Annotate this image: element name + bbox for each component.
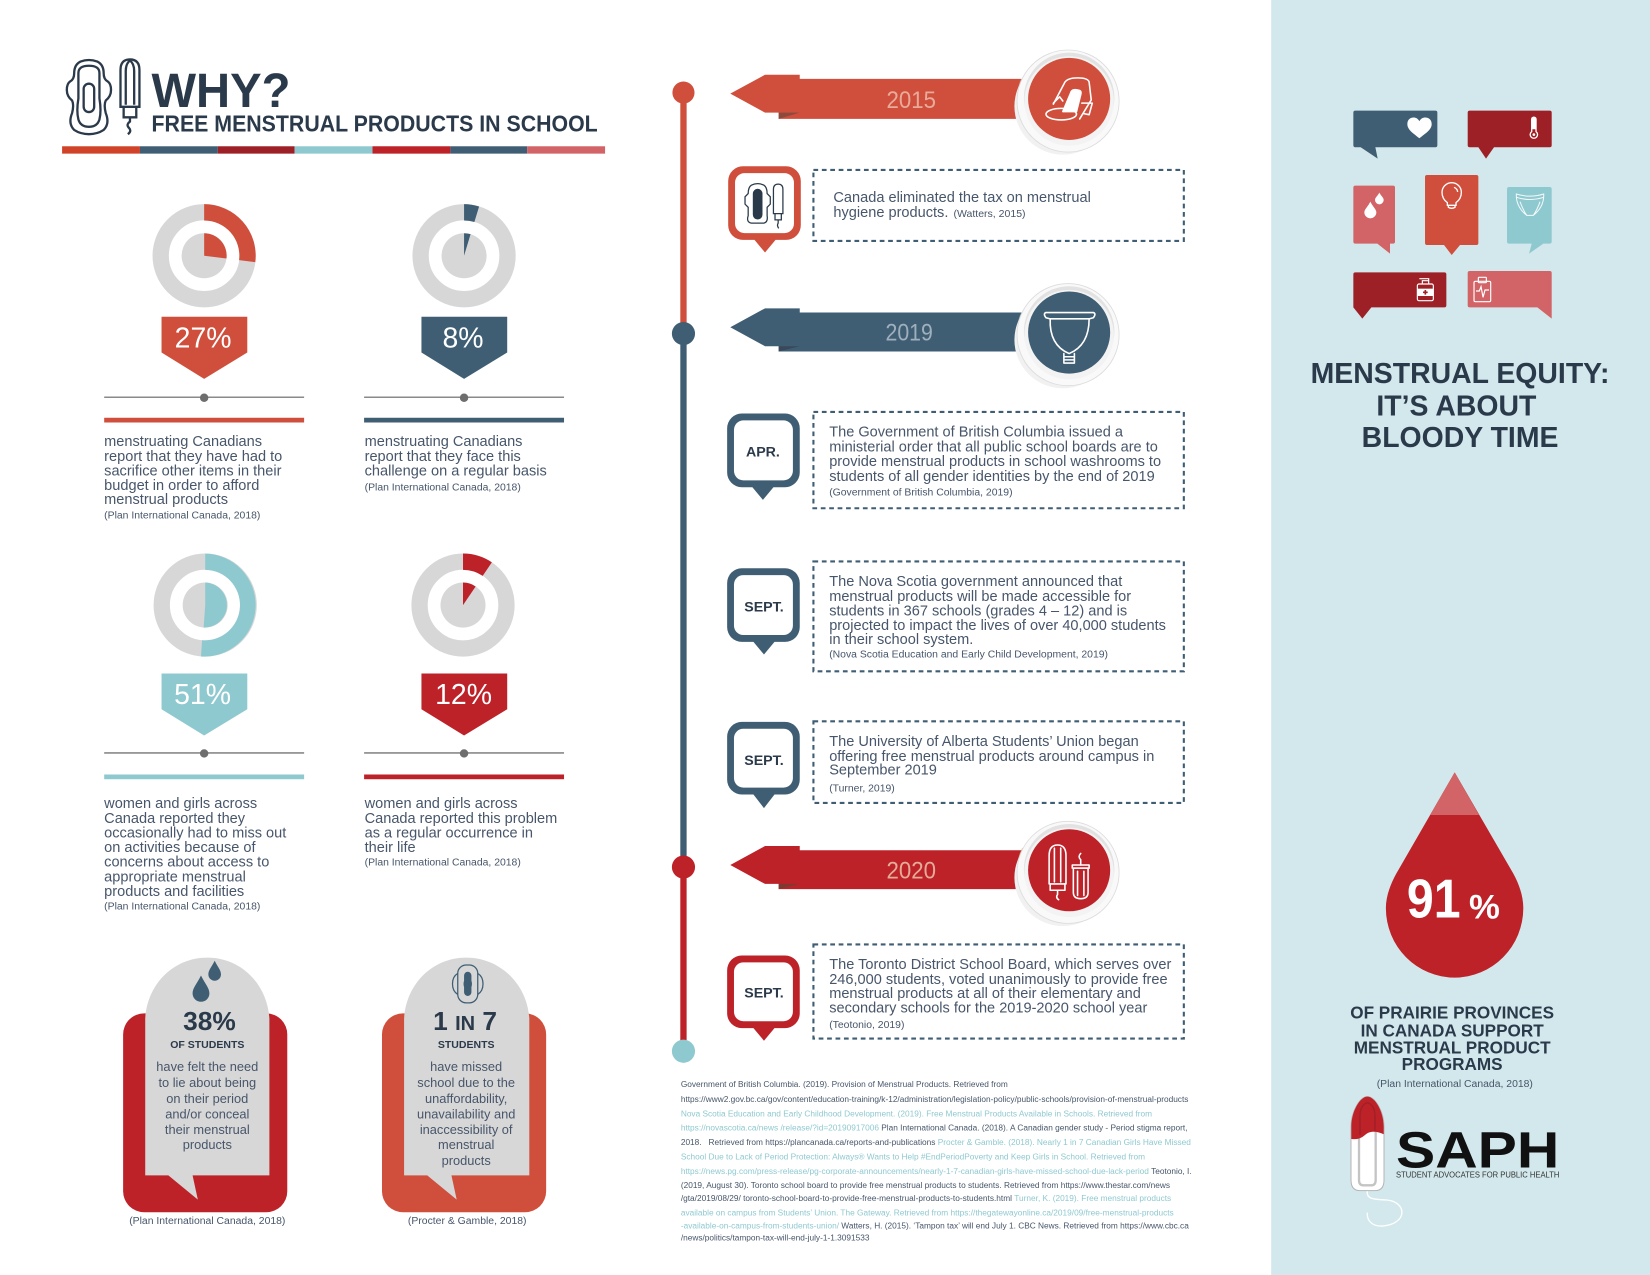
- references: 2018. Retrieved from https://plancanada.ca/reports-and-publications Procter & Gamble. (2018). Nearly 1 in 7 Canadian Girls Have Missed: [681, 1137, 1191, 1147]
- callout: April: APR.: [746, 445, 780, 461]
- banner: 2015: 2015: [887, 87, 936, 114]
- drop: 91%: [1386, 772, 1523, 978]
- subtitle: FREE MENSTRUAL PRODUCTS IN SCHOOL: [152, 111, 598, 137]
- text box: Toronto: secondary schools for the 2019-2020 school year: [829, 1000, 1148, 1016]
- description 27%: menstrual products: [104, 492, 228, 508]
- description: menstrual: [438, 1137, 494, 1152]
- text box: April: The Government of British Columbia issued a: [829, 425, 1124, 441]
- description: and/or conceal: [165, 1107, 249, 1122]
- references: /gta/2019/08/29/ toronto-school-board-to-provide-free-menstrual-products-to-students.html Turner, K. (2019). Free menstrual products: [681, 1193, 1171, 1203]
- value tag 27%: [162, 317, 247, 379]
- bubble: underwear: [1507, 187, 1552, 254]
- description: their menstrual: [165, 1122, 250, 1137]
- text box: Alberta: (Turner, 2019): [829, 783, 895, 794]
- icon: pad: [452, 965, 483, 1003]
- references: https://novascotia.ca/news /release/?id=20190917006 Plan International Canada. (2018). A Canadian gender study - Period stigma report,: [681, 1123, 1188, 1133]
- icon: pad seat: [1046, 78, 1092, 120]
- icon group: speech bubbles: [1353, 111, 1552, 319]
- text box: Alberta: [813, 721, 1184, 803]
- icon: tampon logo: [1351, 1097, 1402, 1226]
- description: on their period: [166, 1091, 248, 1106]
- label of students: OF STUDENTS: [170, 1039, 244, 1051]
- stat description: MENSTRUAL PRODUCT: [1354, 1037, 1551, 1057]
- value tag 51%: 51%: [174, 679, 231, 711]
- description 51%: appropriate menstrual: [104, 869, 246, 885]
- description: products: [442, 1153, 491, 1168]
- description 27%: menstruating Canadians: [104, 434, 262, 450]
- callout: September Alberta: [727, 722, 800, 808]
- description 8%: menstruating Canadians: [365, 434, 522, 450]
- logo: SAPH: STUDENT ADVOCATES FOR PUBLIC HEALTH: [1396, 1169, 1559, 1179]
- value tag 12%: 12%: [435, 679, 492, 711]
- text box: April: provide menstrual products in school washrooms to: [829, 454, 1161, 470]
- bubble: sanitizer: [1353, 272, 1446, 319]
- citation: (Plan International Canada, 2018): [1377, 1079, 1533, 1090]
- description: [417, 1059, 515, 1168]
- callout: September Toronto: [727, 955, 800, 1041]
- description 51%: on activities because of: [104, 840, 257, 856]
- donut chart 51%: [162, 554, 256, 657]
- banner: 2015: [730, 50, 1119, 155]
- heading: menstrual equity: IT’S ABOUT: [1376, 391, 1537, 423]
- callout: 2015 icon bubble: [728, 166, 801, 253]
- description 12%: Canada reported this problem: [365, 811, 557, 827]
- references: Government of British Columbia. (2019). Provision of Menstrual Products. Retrieved from: [681, 1079, 1008, 1089]
- donut chart 12%: [420, 554, 506, 649]
- icon: menstrual cup: [1044, 313, 1095, 363]
- panel: stat 51%: [103, 554, 304, 913]
- description 51%: Canada reported they: [104, 811, 246, 827]
- text box: 2015: hygiene products. (Watters, 2015): [833, 205, 1026, 221]
- description 27%: [104, 434, 282, 521]
- description 51%: products and facilities: [104, 884, 244, 900]
- icon: droplets: [193, 961, 221, 1002]
- panel: stat 12%: [364, 554, 564, 869]
- description 8%: report that they face this: [365, 449, 521, 465]
- references: https://news.pg.com/press-release/pg-corporate-announcements/nearly-1-7-canadian-girls-have-missed-school-due-lack-period Teotonio, I.: [681, 1166, 1192, 1176]
- drop: 91%: %: [1469, 889, 1500, 927]
- stat 1 in 7: 1 IN 7: [433, 1006, 497, 1036]
- stat description: IN CANADA SUPPORT: [1361, 1021, 1544, 1041]
- citation: (Procter & Gamble, 2018): [408, 1216, 527, 1227]
- icon: tampons: [1049, 845, 1089, 900]
- text box: Nova Scotia: students in 367 schools (grades 4 – 12) and is: [829, 604, 1127, 620]
- text box: Nova Scotia: menstrual products will be made accessible for: [829, 589, 1131, 605]
- value tag 27%: 27%: [175, 322, 232, 354]
- description 51%: [103, 796, 286, 913]
- value tag 8%: 8%: [442, 322, 484, 354]
- description 8%: [365, 434, 547, 493]
- description: unavailability and: [417, 1107, 515, 1122]
- bubble: heart: [1353, 111, 1437, 159]
- text box: Toronto: 246,000 students, voted unanimously to provide free: [829, 972, 1168, 988]
- description 27%: sacrifice other items in their: [104, 464, 282, 480]
- value tag 8%: [421, 317, 507, 379]
- icon: header tampon: [120, 59, 139, 134]
- references: /news/politics/tampon-tax-will-end-july-1-1.3091533: [681, 1233, 870, 1243]
- description 12%: as a regular occurrence in: [365, 826, 533, 842]
- text box: Toronto: menstrual products at all of their elementary and: [829, 986, 1141, 1002]
- header colour bar: [62, 146, 605, 154]
- bubble: clipboard: [1468, 271, 1552, 319]
- heading: menstrual equity: [1311, 358, 1609, 454]
- title: WHY?: [152, 64, 290, 118]
- text box: Toronto: (Teotonio, 2019): [829, 1020, 904, 1031]
- text box: Nova Scotia: (Nova Scotia Education and Early Child Development, 2019): [829, 650, 1108, 661]
- text box: Nova Scotia: projected to impact the lives of over 40,000 students: [829, 618, 1166, 634]
- icon: pad and tampon: [745, 184, 783, 228]
- stat description: OF PRAIRIE PROVINCES: [1350, 1003, 1554, 1023]
- text box: Alberta: September 2019: [829, 762, 937, 778]
- value tag 12%: [421, 673, 507, 736]
- banner: 2019: [730, 284, 1119, 388]
- citation: (Plan International Canada, 2018): [129, 1216, 285, 1227]
- stat description: PROGRAMS: [1402, 1054, 1503, 1074]
- panel: 38% of students: [123, 958, 287, 1212]
- description 27%: report that they have had to: [104, 449, 282, 465]
- description: inaccessibility of: [420, 1122, 513, 1137]
- description 51%: occasionally had to miss out: [104, 826, 286, 842]
- description 27%: budget in order to afford: [104, 478, 259, 494]
- logo: SAPH: [1351, 1097, 1559, 1226]
- text box: Toronto: [813, 944, 1184, 1039]
- donut chart 8%: [421, 204, 508, 299]
- text box: 2015: Canada eliminated the tax on menstrual: [833, 190, 1091, 206]
- references: https://www2.gov.bc.ca/gov/content/education-training/k-12/administration/legislation-policy/public-schools/provision-of-menstrual-products: [681, 1094, 1188, 1104]
- banner: 2019: 2019: [886, 319, 933, 346]
- callout: September Nova Scotia: SEPT.: [744, 599, 784, 615]
- text box: Nova Scotia: The Nova Scotia government announced that: [829, 574, 1122, 590]
- callout: September Alberta: SEPT.: [744, 753, 784, 769]
- timeline line: [672, 82, 695, 1063]
- text box: 2015: [813, 170, 1184, 241]
- text box: April: (Government of British Columbia, 2019): [829, 488, 1013, 499]
- donut chart 27%: [161, 204, 256, 299]
- bubble: light bulb: [1425, 175, 1478, 255]
- label students: STUDENTS: [438, 1039, 495, 1051]
- banner: 2020: 2020: [887, 858, 936, 885]
- description 51%: (Plan International Canada, 2018): [104, 902, 260, 913]
- drop: 91%: 91: [1407, 868, 1461, 930]
- stat 38%: 38%: [183, 1006, 236, 1036]
- heading: menstrual equity: BLOODY TIME: [1362, 422, 1558, 454]
- callout: September Toronto: SEPT.: [744, 986, 784, 1002]
- description: school due to the: [417, 1075, 515, 1090]
- description 12%: [364, 796, 557, 869]
- text box: April: [813, 412, 1184, 508]
- text box: Toronto: The Toronto District School Board, which serves over: [829, 957, 1171, 973]
- callout: April: [727, 414, 800, 500]
- references: School Due to Lack of Period Protection: Always® Wants to Help #EndPeriodPoverty and Keep Girls in School. Retrieved from: [681, 1152, 1145, 1162]
- callout: September Nova Scotia: [727, 568, 800, 655]
- text box: April: students of all gender identities by the end of 2019: [829, 469, 1155, 485]
- references: Nova Scotia Education and Early Childhood Development. (2019). Free Menstrual Products Available in Schools. Retrieved from: [681, 1108, 1152, 1118]
- text box: Nova Scotia: in their school system.: [829, 632, 973, 648]
- references: (2019, August 30). Toronto school board to provide free menstrual products to students. Retrieved from https://www.thestar.com/news: [681, 1180, 1170, 1190]
- stat description: [1350, 1003, 1554, 1074]
- text box: Alberta: offering free menstrual products around campus in: [829, 749, 1154, 765]
- description 27%: (Plan International Canada, 2018): [104, 510, 260, 521]
- bubble: thermometer: [1468, 111, 1552, 159]
- references: [681, 1079, 1192, 1243]
- panel: stat 8%: [364, 204, 564, 493]
- description 51%: women and girls across: [103, 796, 257, 812]
- description: to lie about being: [158, 1075, 256, 1090]
- bubble: droplets: [1353, 186, 1395, 254]
- description 12%: (Plan International Canada, 2018): [365, 858, 521, 869]
- text box: Nova Scotia: [813, 561, 1184, 671]
- panel: stat 27%: [104, 204, 304, 521]
- logo: SAPH: SAPH: [1396, 1121, 1559, 1178]
- description 51%: concerns about access to: [104, 855, 269, 871]
- description: products: [183, 1137, 232, 1152]
- description 12%: women and girls across: [364, 796, 518, 812]
- panel: 1 in 7 students: [382, 958, 546, 1212]
- description 8%: (Plan International Canada, 2018): [365, 482, 521, 493]
- description 8%: challenge on a regular basis: [365, 464, 547, 480]
- banner: 2020: [730, 821, 1119, 926]
- description 12%: their life: [365, 840, 416, 856]
- description: have missed: [430, 1059, 502, 1074]
- icon: header pad: [67, 60, 111, 134]
- description: [156, 1059, 258, 1152]
- text box: Alberta: The University of Alberta Students’ Union began: [829, 734, 1139, 750]
- references: available on campus from Students’ Union. The Gateway. Retrieved from https://thegatewayonline.ca/2019/09/free-menstrual-products: [681, 1207, 1174, 1217]
- heading: menstrual equity: MENSTRUAL EQUITY:: [1311, 358, 1609, 390]
- text box: April: ministerial order that all public school boards are to: [829, 439, 1158, 455]
- references: -available-on-campus-from-students-union/ Watters, H. (2015). ‘Tampon tax’ will end July 1. CBC News. Retrieved from https://www.cbc.ca: [681, 1221, 1189, 1231]
- value tag 51%: [162, 673, 247, 736]
- description: unaffordability,: [425, 1091, 507, 1106]
- panel: right side background: [1271, 0, 1650, 1275]
- description: have felt the need: [156, 1059, 258, 1074]
